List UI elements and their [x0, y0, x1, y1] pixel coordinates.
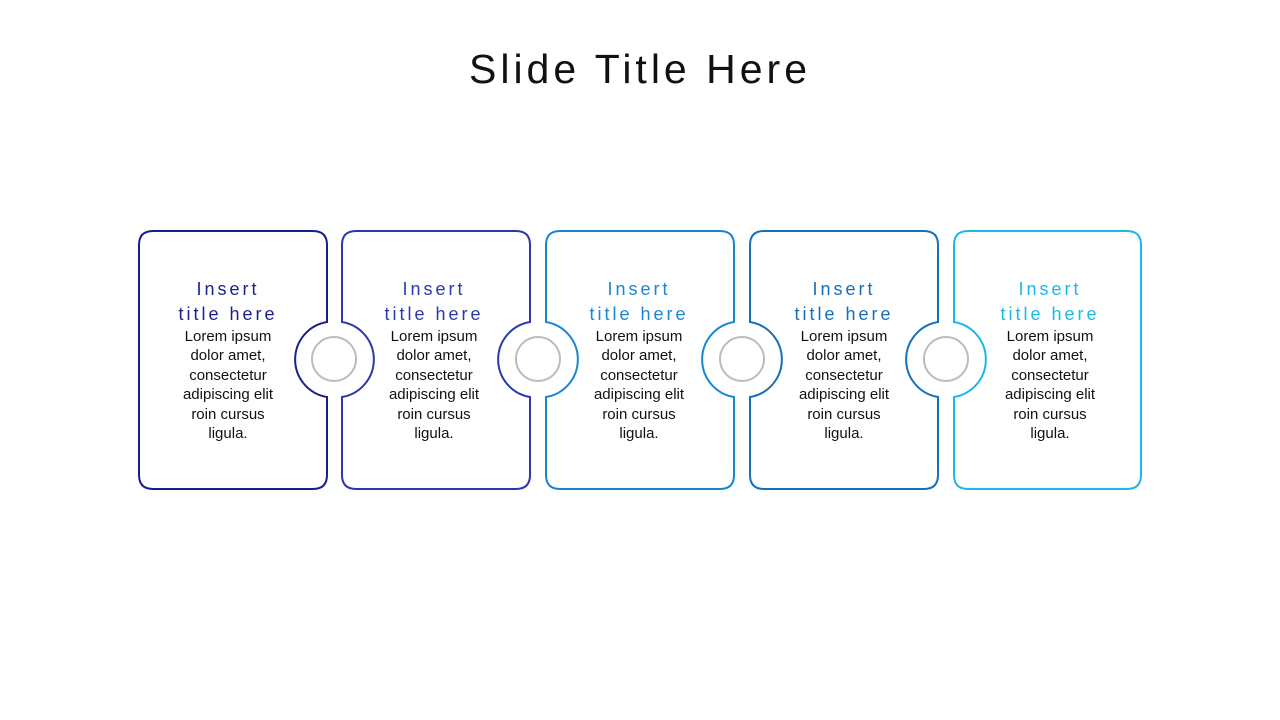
card text 3: ligula. [619, 425, 659, 442]
card text 1: dolor amet, [190, 347, 266, 364]
card text 1: ligula. [208, 425, 248, 442]
card text 2: dolor amet, [396, 347, 472, 364]
card text 4: consectetur [805, 367, 883, 384]
box 1 [139, 231, 327, 489]
box 5 [954, 231, 1141, 489]
card text 1: title here [178, 304, 278, 324]
card text 1 [178, 279, 278, 442]
card text 1: Insert [196, 279, 260, 299]
card text 2: roin cursus [397, 406, 471, 423]
card text 3: Lorem ipsum [596, 328, 682, 345]
card text 5: Insert [1018, 279, 1082, 299]
card text 3: title here [589, 304, 689, 324]
card text 5 [1000, 279, 1100, 442]
card text 2: Insert [402, 279, 466, 299]
card text 4: roin cursus [807, 406, 881, 423]
card text 1: Lorem ipsum [185, 328, 271, 345]
card text 5: ligula. [1030, 425, 1070, 442]
card text 4: adipiscing elit [799, 386, 889, 403]
card text 2: Lorem ipsum [391, 328, 477, 345]
card text 4: Insert [812, 279, 876, 299]
card text 4: Lorem ipsum [801, 328, 887, 345]
card text 5: dolor amet, [1012, 347, 1088, 364]
box 2 [342, 231, 530, 489]
card text 5: adipiscing elit [1005, 386, 1095, 403]
card text 4: ligula. [824, 425, 864, 442]
card text 1: consectetur [189, 367, 267, 384]
card text 2: adipiscing elit [389, 386, 479, 403]
card text 5: roin cursus [1013, 406, 1087, 423]
connector circles [312, 337, 968, 381]
box 4 [750, 231, 938, 489]
card text 2 [384, 279, 484, 442]
card text 3 [589, 279, 689, 442]
card text 3: adipiscing elit [594, 386, 684, 403]
card text 3: Insert [607, 279, 671, 299]
card text 4: dolor amet, [806, 347, 882, 364]
card text 4: title here [794, 304, 894, 324]
card text 3: roin cursus [602, 406, 676, 423]
card text 2: consectetur [395, 367, 473, 384]
card text 1: adipiscing elit [183, 386, 273, 403]
box 3 [546, 231, 734, 489]
card text 5: Lorem ipsum [1007, 328, 1093, 345]
card text 5: consectetur [1011, 367, 1089, 384]
title: Slide Title Here [469, 46, 811, 92]
card text 2: title here [384, 304, 484, 324]
card text 3: consectetur [600, 367, 678, 384]
card text 1: roin cursus [191, 406, 265, 423]
card text 3: dolor amet, [601, 347, 677, 364]
card text 4 [794, 279, 894, 442]
card text 5: title here [1000, 304, 1100, 324]
card text 2: ligula. [414, 425, 454, 442]
